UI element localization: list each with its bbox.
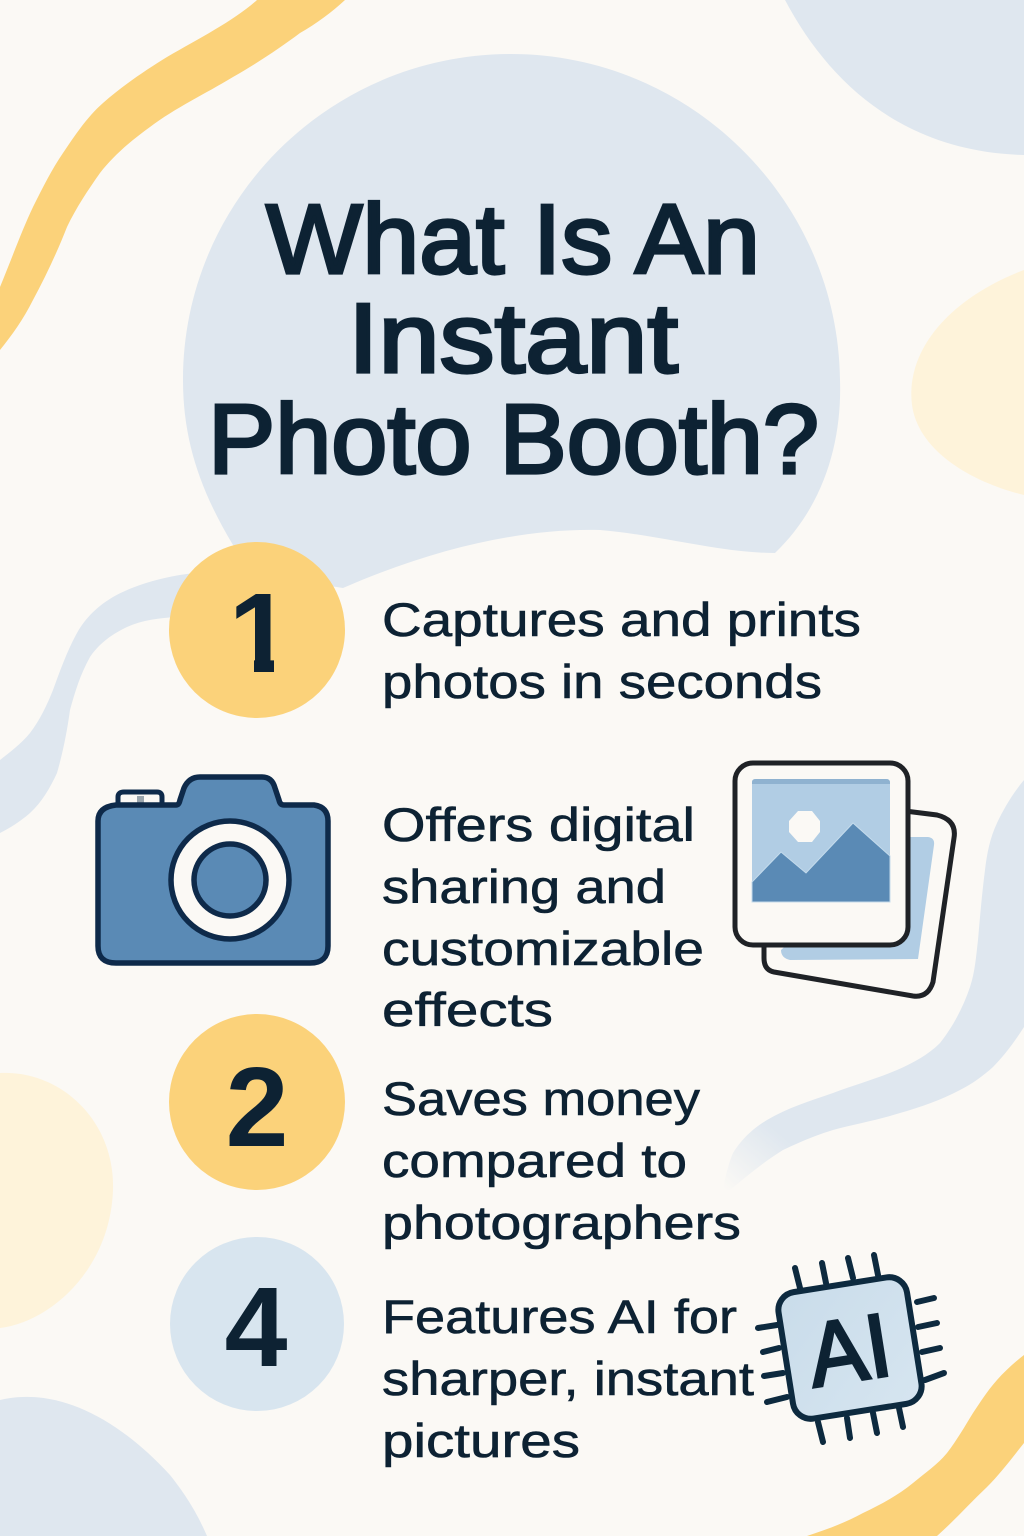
text: offers digital sharing: customizable (382, 922, 704, 975)
text: saves money: photographers (382, 1196, 741, 1249)
title: Instant (348, 283, 678, 393)
icon: camera (98, 777, 328, 963)
icon: AI chip (758, 1255, 944, 1442)
text: features AI: Features AI for (382, 1290, 737, 1343)
badge: number 4: 4 (225, 1264, 288, 1390)
text: offers digital sharing: Offers digital (382, 798, 695, 851)
title: What Is An (266, 184, 760, 294)
text: captures and prints: photos in seconds (382, 655, 822, 708)
text: features AI (382, 1290, 754, 1467)
title (208, 184, 819, 494)
text: offers digital sharing: effects (382, 983, 553, 1036)
text: features AI: sharper, instant (382, 1352, 754, 1405)
badge: number 2: 2 (226, 1044, 288, 1170)
badge: number 1 (169, 542, 345, 718)
badge: number 1: 1 (229, 570, 291, 696)
badge: number 2 (169, 1014, 345, 1190)
icon: AI chip: AI (801, 1295, 898, 1407)
text: offers digital sharing: sharing and (382, 860, 666, 913)
text: saves money: Saves money (382, 1072, 701, 1125)
text: captures and prints (382, 593, 861, 708)
text: saves money (382, 1072, 741, 1249)
icon: photo prints (735, 763, 954, 996)
text: features AI: pictures (382, 1414, 580, 1467)
badge: number 4 (170, 1237, 344, 1411)
text: captures and prints: Captures and prints (382, 593, 861, 646)
text: offers digital sharing (382, 798, 704, 1036)
title: Photo Booth? (208, 384, 819, 494)
text: saves money: compared to (382, 1134, 687, 1187)
